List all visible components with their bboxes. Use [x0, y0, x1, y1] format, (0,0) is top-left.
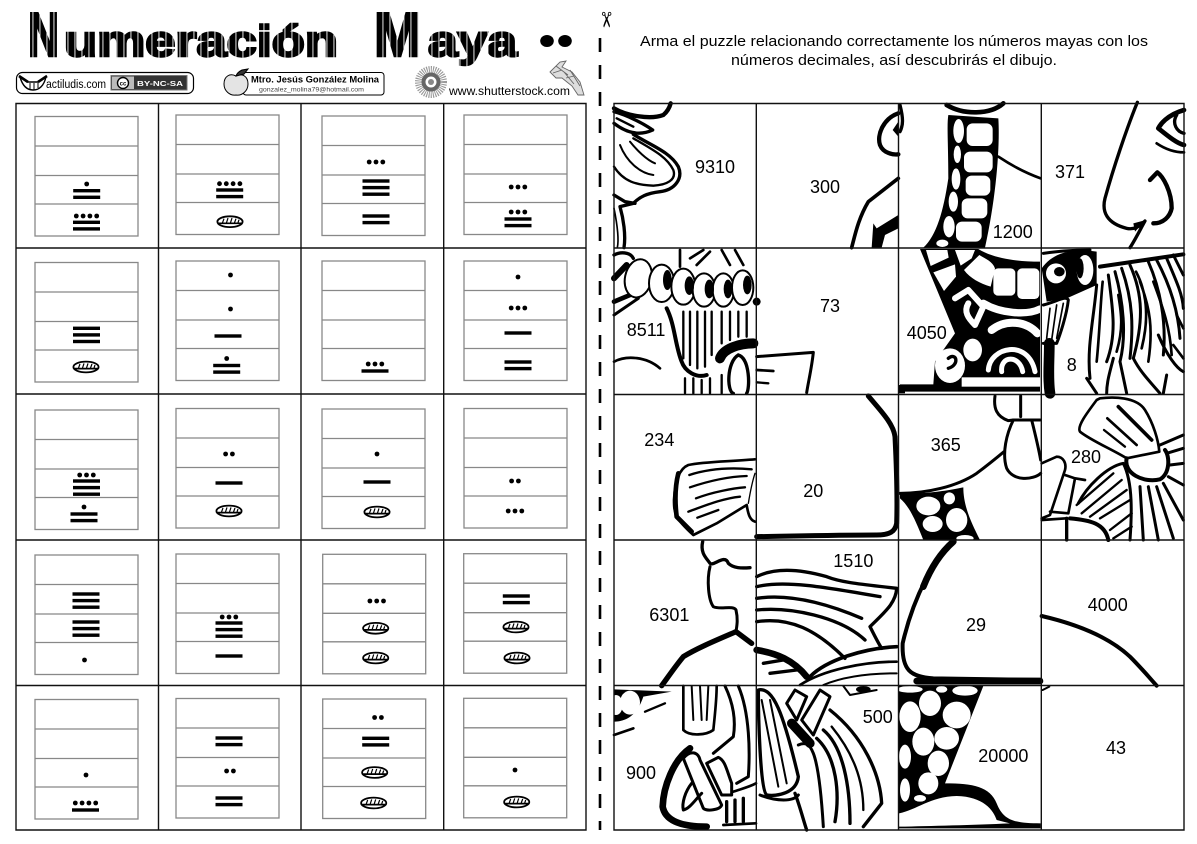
card: row 4 col 3 — [323, 554, 426, 674]
tile art: row 4 col 3 — [903, 542, 1040, 681]
cc by-nc-sa badge — [111, 76, 187, 90]
icon: maya sun — [419, 70, 443, 94]
puzzle art: bottom left tiles — [609, 686, 882, 830]
puzzle art: bottom right tiles — [897, 686, 1049, 828]
author box: gonzalez_molina79@hotmail.com — [259, 86, 365, 94]
number labels: 1510 — [833, 551, 873, 571]
number labels: 4050 — [907, 323, 947, 343]
author box: Mtro. Jesús González Molina — [251, 74, 379, 84]
tile art: row 5 col 2 — [758, 686, 882, 830]
number labels: 73 — [820, 296, 840, 316]
puzzle art: middle right tiles — [900, 396, 1183, 686]
card: row 4 col 1 — [35, 555, 138, 674]
title — [28, 1, 572, 70]
title: N — [28, 1, 59, 70]
card: row 2 col 1 — [35, 262, 138, 382]
tile art: row 1 col 2 — [852, 113, 898, 248]
number labels: 500 — [863, 707, 893, 727]
panel: puzzle — [609, 102, 1184, 830]
card: row 3 col 2 — [176, 408, 279, 528]
instructions: Arma el puzzle relacionando correctamente los números mayas con los — [640, 34, 1148, 50]
number labels: 29 — [966, 615, 986, 635]
card: row 5 col 1 — [35, 700, 138, 819]
icon: actiludis smile — [19, 76, 47, 90]
tile art: row 5 col 3 — [897, 686, 1041, 828]
instructions: números decimales, así descubrirás el dibujo. — [731, 53, 1057, 69]
tile art: row 3 col 1 — [674, 459, 755, 535]
grid lines — [16, 104, 586, 830]
number labels: 8511 — [627, 320, 665, 340]
tile art: row 4 col 2 — [757, 570, 897, 685]
number labels: 6301 — [649, 605, 689, 625]
number labels: 4000 — [1088, 595, 1128, 615]
tile art: row 1 col 1 — [614, 103, 680, 248]
number labels: 9310 — [695, 157, 735, 177]
card: row 5 col 4 — [464, 698, 567, 818]
tile art: row 1 col 4 — [1104, 102, 1184, 248]
card: row 5 col 3 — [323, 699, 426, 818]
card: row 1 col 2 — [176, 115, 279, 234]
icon: bird — [550, 61, 584, 95]
number labels: 20000 — [978, 746, 1028, 766]
tile art: row 1 col 3 — [900, 103, 1041, 248]
card: row 2 col 2 — [176, 261, 279, 380]
puzzle art: top right tiles — [900, 102, 1184, 393]
icon: apple — [224, 69, 248, 95]
number labels: 20 — [803, 481, 823, 501]
tile art: row 5 col 4 — [1043, 687, 1049, 690]
tile art: row 3 col 2 — [757, 396, 897, 537]
tile art: row 2 col 1 — [614, 250, 761, 393]
cc by-nc-sa badge: BY-NC-SA — [137, 79, 184, 88]
number labels: 300 — [810, 177, 840, 197]
tile art: row 2 col 4 — [1042, 250, 1183, 393]
card: row 1 col 4 — [464, 115, 567, 234]
card: row 4 col 4 — [464, 554, 567, 673]
icon: scissors: ✂ — [594, 11, 618, 29]
title: umeración — [64, 17, 338, 66]
number labels: 900 — [626, 763, 656, 783]
cut line — [599, 38, 601, 830]
card: row 3 col 3 — [322, 409, 425, 528]
number labels: 371 — [1055, 162, 1085, 182]
card: row 2 col 3 — [322, 261, 425, 380]
title: aya — [428, 17, 518, 66]
card: row 5 col 2 — [176, 698, 279, 818]
card: row 3 col 4 — [464, 408, 567, 528]
card: row 1 col 1 — [35, 116, 138, 236]
number labels: 43 — [1106, 738, 1126, 758]
tile art: row 3 col 4 — [1042, 398, 1183, 540]
number labels: 8 — [1067, 355, 1077, 375]
title: M — [374, 1, 421, 70]
card: row 4 col 2 — [176, 554, 279, 674]
instructions — [640, 34, 1148, 69]
number labels: 234 — [644, 430, 674, 450]
author box — [243, 72, 384, 95]
tile art: row 4 col 1 — [662, 542, 752, 686]
website text: www.shutterstock.com — [448, 84, 570, 98]
card: row 3 col 1 — [35, 410, 138, 530]
tile art: row 5 col 1 — [609, 686, 756, 827]
card: row 1 col 3 — [322, 116, 425, 236]
badge: actiludis license — [16, 72, 194, 94]
tile art: row 2 col 2 — [757, 352, 905, 393]
tile art: row 4 col 4 — [1042, 616, 1157, 686]
number labels — [626, 157, 1128, 783]
puzzle art: top left tiles — [614, 103, 905, 393]
number labels: 1200 — [993, 222, 1033, 242]
card: row 2 col 4 — [464, 261, 567, 380]
number labels: 365 — [931, 435, 961, 455]
number labels: 280 — [1071, 447, 1101, 467]
tile art: row 2 col 3 — [900, 249, 1040, 392]
puzzle lines — [614, 104, 1184, 830]
cc by-nc-sa badge: cc — [120, 81, 127, 87]
tile art: row 3 col 3 — [900, 396, 1041, 542]
panel: maya numbers grid — [16, 104, 586, 830]
actiludis text: actiludis.com — [46, 79, 106, 91]
puzzle art: middle left tiles — [662, 396, 897, 686]
